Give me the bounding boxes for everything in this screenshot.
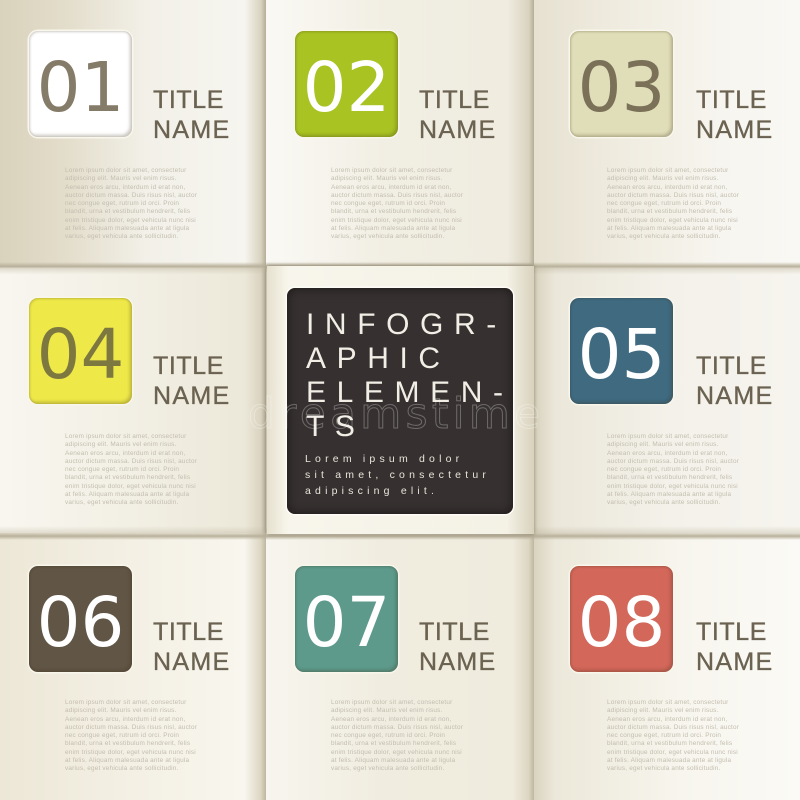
body text 02: varius, eget vehicula ante sollicitudin. [331, 233, 445, 240]
title 08: TITLE [696, 618, 767, 646]
body text 03 [607, 167, 739, 240]
body text 07: nec congue eget, rutrum id orci. Proin [331, 732, 445, 739]
body text 03: varius, eget vehicula ante sollicitudin. [607, 233, 721, 240]
title 04 [153, 352, 230, 410]
body text 06: at felis. Aliquam malesuada ante at ligula [65, 757, 189, 764]
body text 08 [607, 699, 739, 772]
title 02: TITLE [419, 86, 490, 114]
title 04: TITLE [153, 352, 224, 380]
body text 02: nec congue eget, rutrum id orci. Proin [331, 200, 445, 207]
title 01 [153, 86, 230, 144]
body text 06 [65, 699, 197, 772]
title 05: NAME [696, 382, 773, 410]
body text 06: adipiscing elit. Mauris vel enim risus. [65, 707, 177, 714]
number box 08 [570, 566, 673, 672]
title 03 [696, 86, 773, 144]
body text 07: auctor dictum massa. Duis risus nisl, auctor [331, 724, 463, 731]
body text 03: Lorem ipsum dolor sit amet, consectetur [607, 167, 728, 174]
body text 04: adipiscing elit. Mauris vel enim risus. [65, 441, 177, 448]
number box 07 [295, 566, 398, 672]
number box 01: 01 [37, 48, 124, 128]
body text 01: enim tristique dolor, eget vehicula nunc nisi [65, 217, 196, 224]
center heading: ELEMEN- [306, 376, 514, 409]
body text 08: at felis. Aliquam malesuada ante at ligula [607, 757, 731, 764]
number box 05 [570, 298, 673, 404]
number box 07: 07 [303, 583, 390, 663]
title 01: NAME [153, 116, 230, 144]
body text 05: Lorem ipsum dolor sit amet, consectetur [607, 433, 728, 440]
body text 05: auctor dictum massa. Duis risus nisl, auctor [607, 458, 739, 465]
number box 03 [570, 31, 673, 137]
body text 03: auctor dictum massa. Duis risus nisl, auctor [607, 192, 739, 199]
body text 08: nec congue eget, rutrum id orci. Proin [607, 732, 721, 739]
panel: 08 [534, 533, 800, 800]
number box 05: 05 [578, 315, 665, 395]
body text 02: blandit, urna et vestibulum hendrerit, felis [331, 208, 456, 215]
row seam shadows [0, 262, 800, 540]
body text 01: auctor dictum massa. Duis risus nisl, auctor [65, 192, 197, 199]
body text 06: nec congue eget, rutrum id orci. Proin [65, 732, 179, 739]
body text 08: enim tristique dolor, eget vehicula nunc nisi [607, 749, 738, 756]
title 04: NAME [153, 382, 230, 410]
title 08 [696, 618, 773, 676]
number box 01 [29, 31, 132, 137]
body text 05: enim tristique dolor, eget vehicula nunc nisi [607, 483, 738, 490]
title 07 [419, 618, 496, 676]
center text [305, 453, 490, 497]
body text 07: Lorem ipsum dolor sit amet, consectetur [331, 699, 452, 706]
body text 02: auctor dictum massa. Duis risus nisl, auctor [331, 192, 463, 199]
panel: 02 [266, 0, 534, 267]
body text 03: Aenean eros arcu, interdum id erat non, [607, 184, 727, 191]
body text 07: adipiscing elit. Mauris vel enim risus. [331, 707, 443, 714]
number box 04: 04 [37, 315, 124, 395]
body text 07 [331, 699, 463, 772]
body text 08: adipiscing elit. Mauris vel enim risus. [607, 707, 719, 714]
body text 08: blandit, urna et vestibulum hendrerit, felis [607, 740, 732, 747]
body text 06: blandit, urna et vestibulum hendrerit, felis [65, 740, 190, 747]
panel: 01 [0, 0, 266, 267]
body text 07: Aenean eros arcu, interdum id erat non, [331, 716, 451, 723]
body text 05: blandit, urna et vestibulum hendrerit, felis [607, 474, 732, 481]
center text: adipiscing elit. [305, 485, 438, 497]
body text 04: varius, eget vehicula ante sollicitudin. [65, 499, 179, 506]
center heading: INFOGR- [306, 308, 507, 341]
title 05 [696, 352, 773, 410]
title 06 [153, 618, 230, 676]
body text 01: Aenean eros arcu, interdum id erat non, [65, 184, 185, 191]
number box 08: 08 [578, 583, 665, 663]
title 03: TITLE [696, 86, 767, 114]
body text 02: Lorem ipsum dolor sit amet, consectetur [331, 167, 452, 174]
center heading [306, 308, 514, 443]
body text 08: varius, eget vehicula ante sollicitudin. [607, 765, 721, 772]
center heading: TS [306, 410, 366, 443]
title 07: TITLE [419, 618, 490, 646]
panel: 04 [0, 267, 266, 533]
number box 06: 06 [37, 583, 124, 663]
body text 01: blandit, urna et vestibulum hendrerit, felis [65, 208, 190, 215]
center heading: APHIC [306, 342, 451, 375]
body text 08: Aenean eros arcu, interdum id erat non, [607, 716, 727, 723]
body text 06: Lorem ipsum dolor sit amet, consectetur [65, 699, 186, 706]
body text 02: Aenean eros arcu, interdum id erat non, [331, 184, 451, 191]
body text 01: nec congue eget, rutrum id orci. Proin [65, 200, 179, 207]
title 06: NAME [153, 648, 230, 676]
number box 06 [29, 566, 132, 672]
body text 01: at felis. Aliquam malesuada ante at ligula [65, 225, 189, 232]
title 02 [419, 86, 496, 144]
body text 02 [331, 167, 463, 240]
body text 01 [65, 167, 197, 240]
title 06: TITLE [153, 618, 224, 646]
title 07: NAME [419, 648, 496, 676]
body text 01: Lorem ipsum dolor sit amet, consectetur [65, 167, 186, 174]
body text 02: at felis. Aliquam malesuada ante at ligula [331, 225, 455, 232]
body text 05 [607, 433, 739, 506]
center text: sit amet, consectetur [305, 469, 490, 481]
body text 03: nec congue eget, rutrum id orci. Proin [607, 200, 721, 207]
number box 02: 02 [303, 48, 390, 128]
body text 06: enim tristique dolor, eget vehicula nunc nisi [65, 749, 196, 756]
title 05: TITLE [696, 352, 767, 380]
body text 04: blandit, urna et vestibulum hendrerit, felis [65, 474, 190, 481]
body text 04: enim tristique dolor, eget vehicula nunc nisi [65, 483, 196, 490]
body text 01: adipiscing elit. Mauris vel enim risus. [65, 175, 177, 182]
watermark: dreamstime [248, 389, 540, 438]
panel: 07 [266, 533, 534, 800]
body text 03: adipiscing elit. Mauris vel enim risus. [607, 175, 719, 182]
body text 04 [65, 433, 197, 506]
body text 04: nec congue eget, rutrum id orci. Proin [65, 466, 179, 473]
body text 07: enim tristique dolor, eget vehicula nunc nisi [331, 749, 462, 756]
body text 01: varius, eget vehicula ante sollicitudin. [65, 233, 179, 240]
panel: 06 [0, 533, 266, 800]
body text 08: auctor dictum massa. Duis risus nisl, auctor [607, 724, 739, 731]
body text 06: varius, eget vehicula ante sollicitudin. [65, 765, 179, 772]
body text 07: at felis. Aliquam malesuada ante at ligula [331, 757, 455, 764]
body text 02: adipiscing elit. Mauris vel enim risus. [331, 175, 443, 182]
body text 07: varius, eget vehicula ante sollicitudin. [331, 765, 445, 772]
number box 04 [29, 298, 132, 404]
body text 05: nec congue eget, rutrum id orci. Proin [607, 466, 721, 473]
body text 04: at felis. Aliquam malesuada ante at ligula [65, 491, 189, 498]
number box 03: 03 [578, 48, 665, 128]
body text 04: Aenean eros arcu, interdum id erat non, [65, 450, 185, 457]
number box 02 [295, 31, 398, 137]
center text: Lorem ipsum dolor [305, 453, 463, 465]
title 01: TITLE [153, 86, 224, 114]
title 02: NAME [419, 116, 496, 144]
body text 05: adipiscing elit. Mauris vel enim risus. [607, 441, 719, 448]
body text 07: blandit, urna et vestibulum hendrerit, felis [331, 740, 456, 747]
body text 05: varius, eget vehicula ante sollicitudin. [607, 499, 721, 506]
body text 03: enim tristique dolor, eget vehicula nunc nisi [607, 217, 738, 224]
title 03: NAME [696, 116, 773, 144]
panel: center [267, 266, 534, 534]
title 08: NAME [696, 648, 773, 676]
body text 02: enim tristique dolor, eget vehicula nunc nisi [331, 217, 462, 224]
body text 03: at felis. Aliquam malesuada ante at ligula [607, 225, 731, 232]
panel: 03 [534, 0, 800, 267]
body text 04: Lorem ipsum dolor sit amet, consectetur [65, 433, 186, 440]
body text 06: auctor dictum massa. Duis risus nisl, auctor [65, 724, 197, 731]
body text 05: at felis. Aliquam malesuada ante at ligula [607, 491, 731, 498]
panel: 05 [534, 267, 800, 533]
body text 05: Aenean eros arcu, interdum id erat non, [607, 450, 727, 457]
body text 06: Aenean eros arcu, interdum id erat non, [65, 716, 185, 723]
center dark box [287, 288, 513, 514]
body text 08: Lorem ipsum dolor sit amet, consectetur [607, 699, 728, 706]
body text 04: auctor dictum massa. Duis risus nisl, auctor [65, 458, 197, 465]
body text 03: blandit, urna et vestibulum hendrerit, felis [607, 208, 732, 215]
